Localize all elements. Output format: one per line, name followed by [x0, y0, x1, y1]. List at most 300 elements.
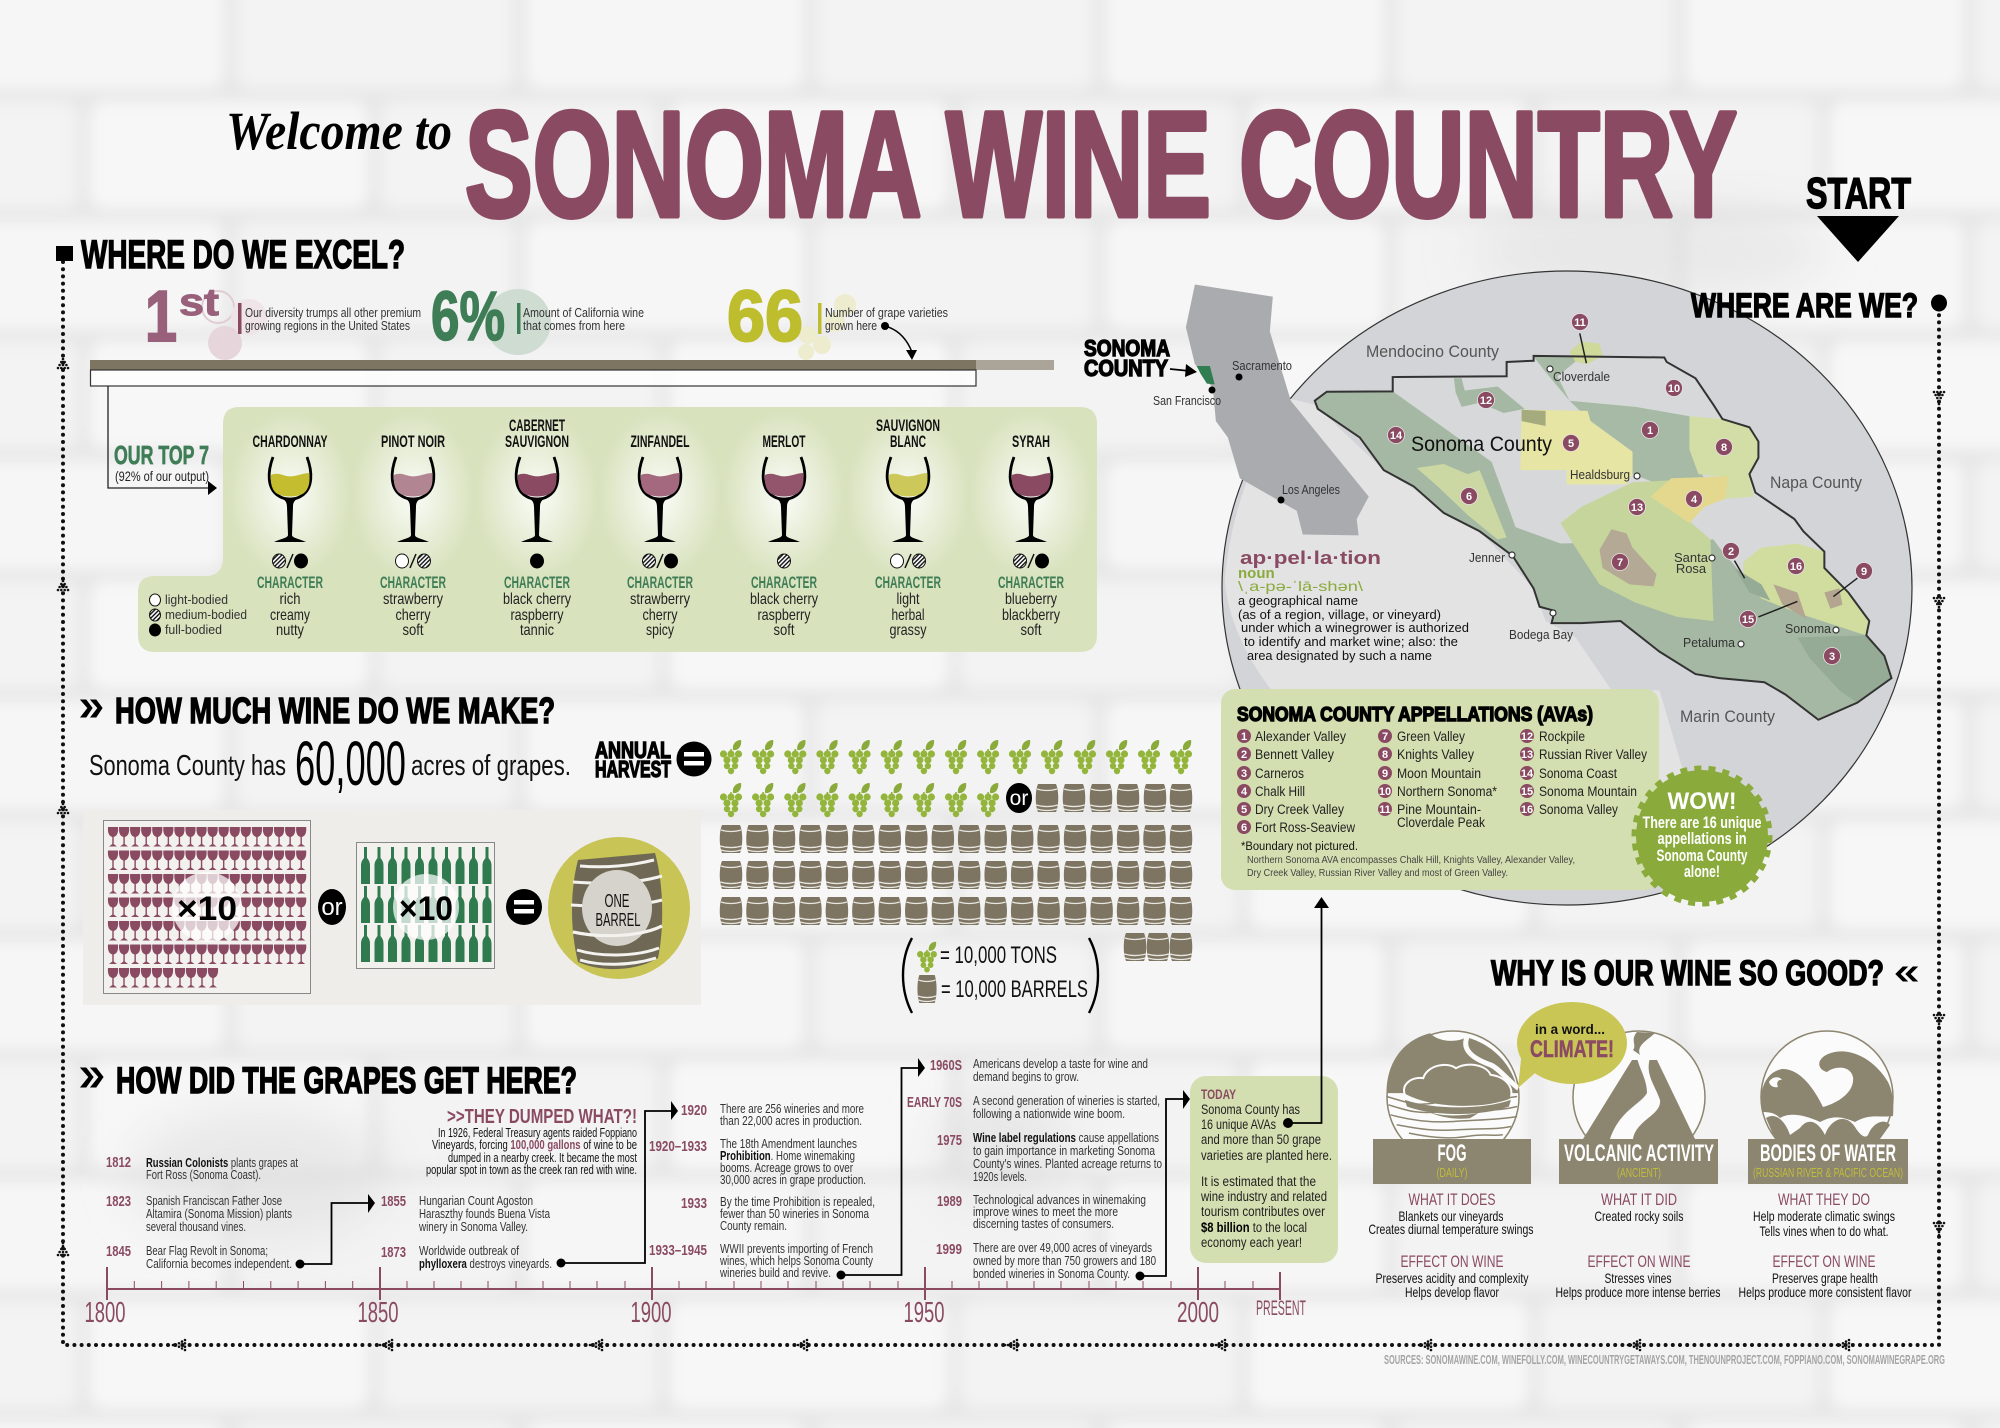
AVA number markers: 4 — [1691, 494, 1698, 506]
today box: Sonoma County has — [1201, 1102, 1300, 1117]
wine: cabernet sauvignon: SAUVIGNON — [505, 432, 569, 451]
start marker — [1806, 169, 1911, 262]
timeline: 1812-1845 — [106, 1154, 298, 1271]
acres sentence: 60,000 — [295, 729, 406, 799]
heading: where are we: WHERE ARE WE? — [1691, 287, 1918, 325]
timeline: 1855-1873: winery in Sonoma Valley. — [418, 1219, 528, 1234]
banner: volcanic activity: (ANCIENT) — [1617, 1165, 1661, 1180]
panel: AVA list: Sonoma Valley — [1539, 802, 1618, 817]
wine: pinot noir: strawberry — [383, 591, 443, 608]
wine: sauvignon blanc: BLANC — [890, 432, 926, 451]
stat: 1st: Our diversity trumps all other premium — [245, 305, 421, 320]
today box: TODAY — [1201, 1086, 1236, 1102]
icon: volcano — [1573, 1031, 1705, 1163]
wine: sauvignon blanc — [875, 416, 941, 639]
arrow today to AVA list — [1283, 897, 1329, 1128]
timeline: 1812-1845: California becomes independent. — [146, 1256, 292, 1271]
speech bubble: climate: in a word... — [1535, 1021, 1605, 1037]
banner: bodies of water — [1748, 1139, 1908, 1184]
column: bodies of water: Help moderate climatic swings — [1753, 1208, 1895, 1224]
state of California — [1186, 284, 1369, 535]
varieties bar — [90, 360, 1054, 386]
our top 7 label: (92% of our output) — [115, 468, 209, 484]
timeline: 1960s-1999: Americans develop a taste for wine and — [973, 1056, 1148, 1071]
timeline: 1960s-1999 — [907, 1056, 1162, 1281]
timeline: 1855-1873: Hungarian Count Agoston — [419, 1193, 533, 1208]
stat: 6%: Amount of California wine — [523, 305, 644, 320]
banner: fog: (DAILY) — [1436, 1165, 1468, 1180]
timeline: 1960s-1999: 1960S — [930, 1057, 962, 1074]
harvest legend — [903, 938, 1098, 1013]
icon: waves — [1761, 1031, 1893, 1163]
wine: sauvignon blanc: herbal — [892, 607, 924, 624]
today box: economy each year! — [1201, 1235, 1302, 1250]
timeline: 1855-1873: phylloxera destroys vineyards. — [419, 1256, 552, 1271]
timeline: 1920-1945: WWII prevents importing of French — [720, 1241, 873, 1256]
column: fog: Helps develop flavor — [1405, 1284, 1499, 1300]
annual harvest label: ANNUAL — [595, 737, 671, 763]
timeline: 1920-1945: 1933 — [681, 1195, 707, 1212]
state city labels: Los Angeles — [1282, 482, 1340, 497]
AVA number markers: 3 — [1829, 651, 1835, 663]
panel: AVA list: *Boundary not pictured. — [1241, 841, 1358, 853]
timeline: 1960s-1999: EARLY 70S — [907, 1094, 962, 1111]
panel: AVA list: Fort Ross-Seaview — [1255, 820, 1355, 835]
banner: volcanic activity — [1559, 1139, 1718, 1184]
arrow to top 7 — [108, 386, 217, 495]
AVA number markers: 8 — [1721, 442, 1727, 454]
timeline: 1960s-1999: owned by more than 750 growers and 180 — [973, 1253, 1156, 1268]
AVA number markers — [1388, 314, 1872, 664]
wine: cabernet sauvignon: black cherry — [503, 591, 571, 608]
WOW badge: WOW! — [1668, 788, 1736, 815]
AVA number markers: 13 — [1631, 502, 1643, 514]
timeline: 1920-1945: 30,000 acres in grape production. — [720, 1172, 866, 1187]
they dumped what callout: Vineyards, forcing 100,000 gallons of wine to be — [432, 1137, 637, 1152]
wine: chardonnay: rich — [280, 591, 300, 608]
panel: AVA list: Moon Mountain — [1397, 766, 1481, 781]
panel: AVA list: 4 — [1241, 786, 1248, 798]
wine: syrah: blueberry — [1005, 591, 1057, 608]
city labels: Santa — [1674, 550, 1709, 565]
county labels — [1366, 342, 1862, 726]
county outline — [1315, 356, 1892, 720]
banner: bodies of water: (RUSSIAN RIVER & PACIFIC OCEAN) — [1753, 1165, 1903, 1180]
column: bodies of water: Tells vines when to do what. — [1760, 1223, 1888, 1239]
city labels: Jenner — [1469, 550, 1506, 565]
panel: AVA list: Carneros — [1255, 766, 1304, 781]
banner: bodies of water: BODIES OF WATER — [1760, 1140, 1896, 1167]
WOW badge: alone! — [1684, 862, 1720, 881]
leader lines — [1580, 333, 1857, 617]
AVA: Pine Mountain — [1570, 342, 1603, 364]
arrow 1945 to 1960s — [836, 1058, 925, 1280]
timeline: 1920-1945: There are 256 wineries and more — [720, 1101, 864, 1116]
panel: AVA list: Pine Mountain- — [1397, 802, 1481, 817]
AVA: Rockpile — [1454, 378, 1525, 413]
timeline: 1812-1845: Fort Ross (Sonoma Coast). — [146, 1167, 261, 1182]
timeline axis: PRESENT — [1256, 1297, 1306, 1320]
timeline: 1960s-1999: discerning tastes of consumers. — [973, 1216, 1114, 1231]
today box — [1190, 1076, 1338, 1263]
timeline: 1812-1845: 1812 — [106, 1154, 131, 1171]
stat: 6%: 6% — [431, 277, 505, 355]
wine: cabernet sauvignon — [503, 416, 571, 639]
definition of appellation: ap·pel·la·tion — [1240, 548, 1381, 568]
AVA: Carneros — [1797, 635, 1892, 703]
equals — [506, 889, 542, 925]
column: volcanic activity: EFFECT ON WINE — [1588, 1252, 1690, 1271]
column: bodies of water: Preserves grape health — [1772, 1270, 1878, 1286]
WOW badge: There are 16 unique — [1642, 813, 1762, 832]
speech bubble: climate — [1517, 1002, 1627, 1088]
city labels: Cloverdale — [1553, 369, 1610, 384]
city labels: Petaluma — [1683, 635, 1736, 650]
frame end dot — [1931, 294, 1947, 312]
timeline: 1960s-1999: Wine label regulations cause appellations — [973, 1130, 1159, 1145]
timeline: 1920-1945: wineries build and revive. — [719, 1265, 831, 1280]
wine: zinfandel: ZINFANDEL — [630, 432, 690, 451]
arrow 1999 to today — [1136, 1090, 1190, 1280]
AVA: Fort Ross-Seaview — [1417, 464, 1507, 539]
panel: AVA list: Rockpile — [1539, 729, 1585, 744]
title: Welcome to — [226, 101, 452, 161]
wine: merlot: MERLOT — [762, 432, 806, 451]
panel: AVA list: Green Valley — [1397, 729, 1465, 744]
barrel rows — [720, 784, 1192, 961]
panel: AVA list: 6 — [1241, 822, 1247, 834]
timeline: 1812-1845: 1823 — [106, 1193, 131, 1210]
timeline: 1855-1873 — [381, 1193, 552, 1271]
AVA number markers: 15 — [1742, 614, 1754, 626]
panel: top 7 wines — [138, 407, 1097, 652]
panel: AVA list: 8 — [1382, 749, 1388, 761]
wine: zinfandel: spicy — [646, 622, 674, 639]
timeline axis: 1950 — [904, 1297, 944, 1329]
city labels: Sonoma — [1785, 621, 1832, 636]
speech bubble: climate: CLIMATE! — [1530, 1036, 1614, 1063]
panel: AVA list: 16 — [1521, 804, 1533, 816]
harvest legend: = 10,000 TONS — [940, 942, 1057, 969]
or: or — [1010, 787, 1028, 810]
wine: zinfandel: CHARACTER — [627, 573, 693, 592]
state city labels: Sacramento — [1232, 358, 1292, 373]
stat: 66: grown here — [825, 318, 877, 333]
county labels: Marin County — [1680, 707, 1775, 726]
timeline: 1960s-1999: improve wines to meet the more — [973, 1204, 1118, 1219]
panel: AVA list: 10 — [1379, 786, 1391, 798]
panel: AVA list: Sonoma Mountain — [1539, 784, 1637, 799]
timeline: 1812-1845: Spanish Franciscan Father Jose — [146, 1193, 282, 1208]
grape harvest rows — [720, 740, 1192, 817]
panel: AVA list: Sonoma Coast — [1539, 766, 1617, 781]
timeline: 1920-1945: 1920–1933 — [649, 1138, 707, 1155]
wine: chardonnay: CHARDONNAY — [252, 432, 328, 451]
panel: AVA list: 1 — [1241, 731, 1247, 743]
they dumped what callout: dumped in a nearby creek. It became the most — [448, 1150, 637, 1165]
wine: chardonnay: creamy — [270, 607, 310, 624]
wine: sauvignon blanc: CHARACTER — [875, 573, 941, 592]
they dumped what callout — [426, 1106, 637, 1177]
timeline: 1855-1873: Haraszthy founds Buena Vista — [419, 1206, 551, 1221]
or — [1006, 783, 1032, 813]
timeline: 1920-1945: By the time Prohibition is repealed, — [720, 1194, 875, 1209]
body legend: full-bodied — [165, 622, 222, 637]
AVA: Sonoma Coast — [1315, 391, 1892, 720]
timeline: 1960s-1999: demand begins to grow. — [973, 1069, 1079, 1084]
wine: merlot: soft — [774, 622, 795, 639]
timeline: 1920-1945: fewer than 50 wineries in Sonoma — [720, 1206, 870, 1221]
timeline: 1855-1873: 1855 — [381, 1193, 406, 1210]
city labels: Rosa — [1676, 561, 1707, 576]
column: bodies of water: WHAT THEY DO — [1778, 1190, 1870, 1209]
they dumped what callout: In 1926, Federal Treasury agents raided Foppiano — [438, 1125, 637, 1140]
timeline: 1920-1945: 1933–1945 — [649, 1242, 707, 1259]
timeline axis: 1850 — [358, 1297, 398, 1329]
county labels: Sonoma County — [1411, 433, 1552, 456]
today box: and more than 50 grape — [1201, 1132, 1321, 1147]
wine: merlot: CHARACTER — [751, 573, 817, 592]
wine: pinot noir: PINOT NOIR — [381, 432, 445, 451]
wine: sauvignon blanc: grassy — [890, 622, 926, 639]
timeline: 1855-1873: 1873 — [381, 1244, 406, 1261]
wine: syrah: blackberry — [1002, 607, 1060, 624]
Sonoma County callout — [1084, 335, 1197, 381]
panel: AVA list: 7 — [1382, 731, 1388, 743]
today box: It is estimated that the — [1201, 1174, 1316, 1189]
or — [318, 889, 346, 925]
timeline axis: 2000 — [1177, 1297, 1219, 1329]
AVA: Russian River Valley — [1561, 480, 1713, 621]
today box: wine industry and related — [1200, 1189, 1327, 1204]
definition of appellation: (as of a region, village, or vineyard) — [1238, 608, 1441, 622]
they dumped what callout: popular spot in town as the creek ran red with wine. — [426, 1162, 637, 1177]
wine: chardonnay — [252, 432, 328, 639]
timeline: 1960s-1999: to gain importance in marketing Sonoma — [973, 1143, 1156, 1158]
wine: pinot noir: soft — [402, 622, 424, 639]
AVA number markers: 1 — [1647, 425, 1653, 437]
column: volcanic activity: Created rocky soils — [1594, 1208, 1684, 1224]
stat: 1st: 1 — [145, 277, 177, 357]
stat: 66 — [727, 277, 948, 360]
wine: chardonnay: CHARACTER — [257, 573, 323, 592]
or: or — [321, 894, 343, 921]
wine: zinfandel — [627, 432, 693, 639]
column: fog: Creates diurnal temperature swings — [1368, 1221, 1534, 1237]
definition of appellation: under which a winegrower is authorized — [1241, 621, 1469, 635]
panel: AVA list: 14 — [1521, 768, 1534, 780]
stat: 1st — [145, 277, 421, 360]
glasses grid — [104, 820, 310, 994]
timeline: 1960s-1999: 1989 — [937, 1193, 962, 1210]
acres sentence — [89, 729, 571, 799]
wine: merlot: raspberry — [758, 607, 810, 624]
acres sentence: Sonoma County has — [89, 750, 286, 782]
wine: cabernet sauvignon: raspberry — [510, 607, 564, 624]
arrow 1873 to 1920 — [556, 1101, 678, 1268]
they dumped what callout: >>THEY DUMPED WHAT?! — [447, 1106, 637, 1128]
wine: merlot — [750, 432, 818, 639]
definition of appellation — [1238, 548, 1469, 663]
timeline: 1812-1845: 1845 — [106, 1243, 131, 1260]
column: volcanic activity: Stresses vines — [1604, 1270, 1672, 1286]
acres sentence: acres of grapes. — [411, 750, 571, 782]
banner: volcanic activity: VOLCANIC ACTIVITY — [1564, 1140, 1714, 1167]
panel: AVA list: Northern Sonoma* — [1397, 784, 1498, 799]
dotted frame — [63, 262, 1939, 1345]
timeline: 1812-1845: Bear Flag Revolt in Sonoma; — [146, 1243, 268, 1258]
AVA number markers: 12 — [1480, 395, 1492, 407]
AVA number markers: 7 — [1617, 557, 1623, 569]
panel: AVA list: 5 — [1241, 804, 1247, 816]
AVA: Knights Valley — [1689, 416, 1758, 499]
today box: 16 unique AVAs — [1201, 1117, 1276, 1132]
definition of appellation: noun — [1238, 565, 1275, 582]
AVA number markers: 6 — [1466, 491, 1472, 503]
annual harvest label: HARVEST — [595, 756, 671, 782]
county base — [1315, 356, 1892, 720]
wine: sauvignon blanc: light — [896, 591, 920, 608]
body legend — [149, 592, 247, 637]
column: fog: Blankets our vineyards — [1398, 1208, 1504, 1224]
bottles grid — [356, 842, 494, 968]
panel: AVA list: 12 — [1521, 731, 1533, 743]
wine: cabernet sauvignon: tannic — [520, 622, 554, 639]
city labels: Healdsburg — [1570, 467, 1630, 482]
today box: varieties are planted here. — [1201, 1148, 1332, 1163]
timeline: 1960s-1999: 1999 — [936, 1241, 962, 1258]
today box: $8 billion to the local — [1201, 1220, 1307, 1235]
body legend: medium-bodied — [165, 607, 247, 622]
wine: syrah: CHARACTER — [998, 573, 1064, 592]
timeline: 1960s-1999: following a nationwide wine boom. — [973, 1106, 1125, 1121]
harvest legend: = 10,000 BARRELS — [941, 976, 1088, 1003]
wine: chardonnay: nutty — [276, 622, 304, 639]
state city labels: San Francisco — [1153, 393, 1221, 408]
timeline: 1812-1845: Altamira (Sonoma Mission) plants — [146, 1206, 292, 1221]
timeline: 1960s-1999: bonded wineries in Sonoma County. — [973, 1266, 1130, 1281]
timeline: 1960s-1999: County's wines. Planted acreage returns to — [973, 1156, 1162, 1171]
panel: AVA list: SONOMA COUNTY APPELLATIONS (AVAs) — [1237, 704, 1593, 726]
panel: barrel equivalence — [83, 810, 701, 1005]
wine: sauvignon blanc: SAUVIGNON — [876, 416, 940, 435]
timeline: 1960s-1999: Technological advances in winemaking — [973, 1192, 1146, 1207]
column: fog: WHAT IT DOES — [1408, 1190, 1496, 1209]
timeline axis — [84, 1267, 1306, 1329]
AVA: Dry Creek Valley — [1520, 410, 1633, 484]
AVA number markers: 14 — [1390, 430, 1403, 442]
frame start square — [56, 246, 73, 261]
wine: zinfandel: cherry — [642, 607, 678, 624]
wine: merlot: black cherry — [750, 591, 818, 608]
body legend: light-bodied — [165, 592, 228, 607]
column: fog: EFFECT ON WINE — [1400, 1252, 1504, 1271]
AVA: Sonoma Mountain — [1773, 584, 1806, 619]
timeline axis: 1800 — [84, 1297, 126, 1329]
wine: syrah — [998, 432, 1064, 639]
definition of appellation: a geographical name — [1238, 594, 1358, 608]
city labels: Bodega Bay — [1509, 627, 1573, 642]
timeline: 1920-1945: 1920 — [681, 1102, 707, 1119]
panel: AVA list: Knights Valley — [1397, 747, 1474, 762]
timeline: 1960s-1999: 1975 — [937, 1132, 962, 1149]
one barrel — [548, 837, 690, 979]
column: volcanic activity: WHAT IT DID — [1601, 1190, 1677, 1209]
wine: cabernet sauvignon: CHARACTER — [504, 573, 570, 592]
panel: AVA list: 11 — [1379, 804, 1391, 816]
timeline: 1855-1873: Worldwide outbreak of — [419, 1243, 519, 1258]
timeline axis: 1900 — [630, 1297, 672, 1329]
our top 7 label: OUR TOP 7 — [114, 440, 209, 470]
wine: pinot noir: CHARACTER — [380, 573, 446, 592]
stat: 66: Number of grape varieties — [825, 305, 948, 320]
AVA: Bennett Valley — [1734, 568, 1770, 601]
ocean area — [1225, 399, 1683, 805]
stat: 1st: growing regions in the United States — [245, 318, 410, 333]
timeline: 1920-1945: County remain. — [720, 1218, 787, 1233]
panel: AVA list: Bennett Valley — [1255, 747, 1334, 762]
timeline: 1920-1945 — [649, 1101, 875, 1280]
column: fog — [1368, 1031, 1534, 1300]
AVA: Green Valley — [1600, 529, 1657, 586]
stat: 6%: that comes from here — [523, 318, 625, 333]
glasses grid: ×10 — [177, 890, 237, 928]
panel: AVA list: Russian River Valley — [1539, 747, 1647, 762]
wine: zinfandel: strawberry — [630, 591, 690, 608]
start marker: START — [1806, 169, 1911, 218]
panel: AVA list: Chalk Hill — [1255, 784, 1305, 799]
WOW badge — [1635, 769, 1769, 903]
panel: AVA list: 3 — [1241, 768, 1247, 780]
AVA: Chalk Hill — [1651, 476, 1728, 523]
panel: AVA list: 9 — [1382, 768, 1388, 780]
AVA: Moon Mountain — [1824, 588, 1842, 609]
one barrel: ONE — [604, 891, 630, 911]
timeline: 1812-1845: Russian Colonists plants grapes at — [146, 1155, 298, 1170]
panel: AVA list: Dry Creek Valley, Russian River Valley and most of Green Valley. — [1247, 868, 1508, 879]
column: bodies of water: EFFECT ON WINE — [1772, 1252, 1876, 1271]
timeline: 1920-1945: Prohibition. Home winemaking — [720, 1148, 855, 1163]
AVA number markers: 5 — [1568, 438, 1574, 450]
Sonoma location on state — [1197, 366, 1215, 384]
timeline: 1920-1945: booms. Acreage grows to over — [720, 1160, 854, 1175]
AVA: Alexander Valley — [1534, 357, 1707, 486]
AVA number markers: 10 — [1668, 383, 1680, 395]
column: bodies of water: Helps produce more consistent flavor — [1738, 1284, 1912, 1300]
heading: how did the grapes: HOW DID THE GRAPES GET HERE? — [116, 1060, 577, 1101]
stat: 66: 66 — [727, 277, 803, 357]
timeline: 1960s-1999: 1920s levels. — [973, 1169, 1027, 1184]
our top 7 label — [114, 440, 209, 484]
county labels: Napa County — [1770, 473, 1862, 492]
timeline: 1920-1945: than 22,000 acres in production. — [720, 1113, 862, 1128]
WOW badge: Sonoma County — [1656, 846, 1748, 865]
wine: pinot noir: cherry — [396, 607, 430, 624]
city labels — [1469, 366, 1839, 650]
Sonoma County callout: SONOMA — [1084, 335, 1170, 361]
Sonoma County callout: COUNTY — [1084, 355, 1168, 381]
timeline: 1960s-1999: A second generation of wineries is started, — [973, 1093, 1160, 1108]
heading: where do we excel: WHERE DO WE EXCEL? — [81, 233, 405, 277]
panel: AVA list: 2 — [1241, 749, 1247, 761]
arrow 1845 to 1855 — [296, 1194, 375, 1268]
definition of appellation: \ˌa-pə-ˈlā-shən\ — [1238, 578, 1363, 594]
AVA number markers: 2 — [1728, 546, 1734, 558]
icon: fog — [1387, 1031, 1519, 1163]
AVA number markers: 11 — [1574, 317, 1586, 329]
stat: 1st: st — [179, 282, 219, 324]
today box: tourism contributes over — [1201, 1204, 1325, 1219]
